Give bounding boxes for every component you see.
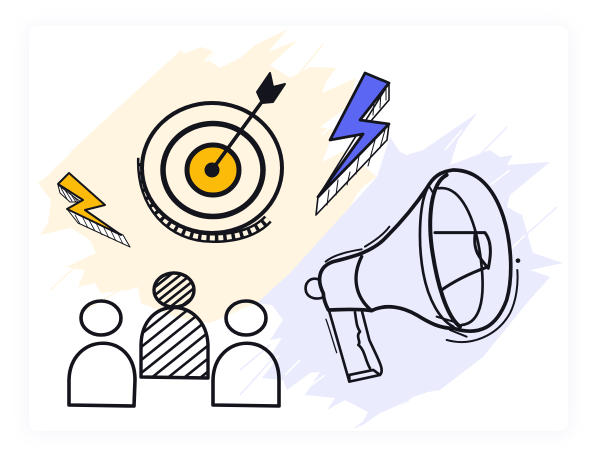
megaphone rim lines: [420, 188, 453, 327]
arrow: [204, 73, 285, 178]
target: [142, 73, 285, 238]
person center, hatched: [139, 271, 210, 380]
megaphone bell: [320, 170, 511, 331]
megaphone back knob: [306, 279, 323, 299]
card: [29, 26, 568, 431]
icon: megaphone: [306, 170, 520, 382]
icon: yellow bolt: [58, 173, 130, 247]
megaphone collar: [356, 257, 372, 311]
illustration: [38, 29, 562, 428]
target outer ring: [142, 103, 282, 233]
target middle ring: [163, 124, 263, 216]
megaphone inner cone: [435, 233, 490, 291]
person left: [69, 301, 135, 406]
card shadow: [27, 26, 570, 433]
brush: yellow: [38, 29, 377, 323]
target bullseye: [187, 145, 239, 195]
megaphone handle: [329, 310, 382, 382]
brush: blue: [240, 113, 563, 428]
people: [67, 271, 281, 408]
person right: [213, 301, 279, 406]
target side hatching: [142, 158, 268, 238]
icon: blue bolt: [316, 73, 389, 215]
